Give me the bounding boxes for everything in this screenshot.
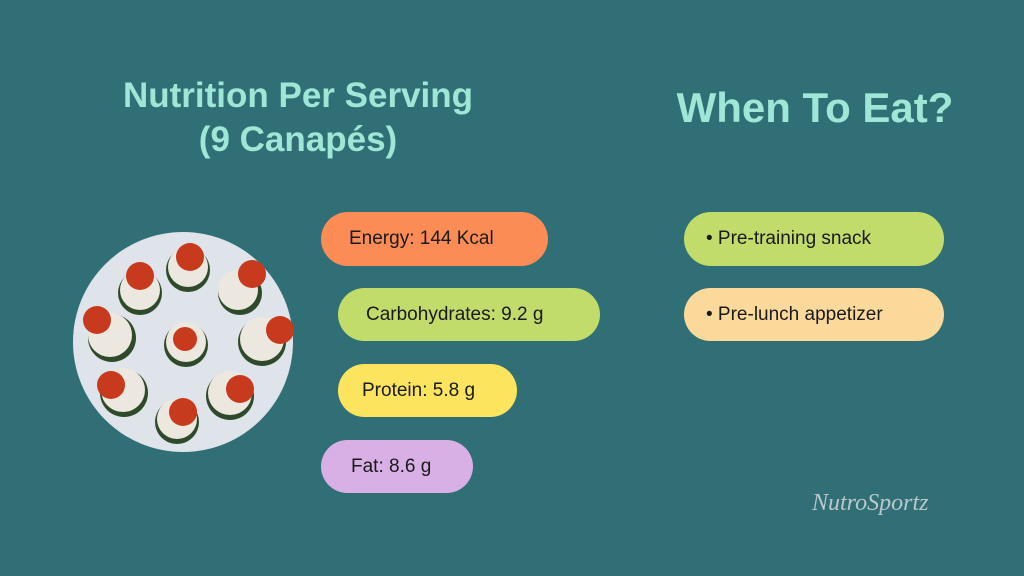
pill: carbohydrates xyxy=(338,288,600,341)
title: nutrition: Nutrition Per Serving xyxy=(123,76,473,115)
pill: protein xyxy=(338,364,517,417)
pill: energy: Energy: 144 Kcal xyxy=(349,228,494,249)
pill: pre-lunch appetizer: • Pre-lunch appetizer xyxy=(706,304,883,324)
pill: protein: Protein: 5.8 g xyxy=(362,380,475,400)
logo: NutroSportz: NutroSportz xyxy=(812,490,928,516)
pill: fat: Fat: 8.6 g xyxy=(351,456,431,476)
image: canapé plate xyxy=(73,232,294,452)
pill: energy xyxy=(321,212,548,266)
pill: pre-lunch appetizer xyxy=(684,288,944,341)
title: nutrition: (9 Canapés) xyxy=(199,120,397,159)
title: nutrition xyxy=(123,76,473,159)
pill: pre-training snack: • Pre-training snack xyxy=(706,228,871,249)
title: when to eat: When To Eat? xyxy=(677,84,953,131)
pill: fat xyxy=(321,440,473,493)
pill: carbohydrates: Carbohydrates: 9.2 g xyxy=(366,304,543,324)
pill: pre-training snack xyxy=(684,212,944,266)
